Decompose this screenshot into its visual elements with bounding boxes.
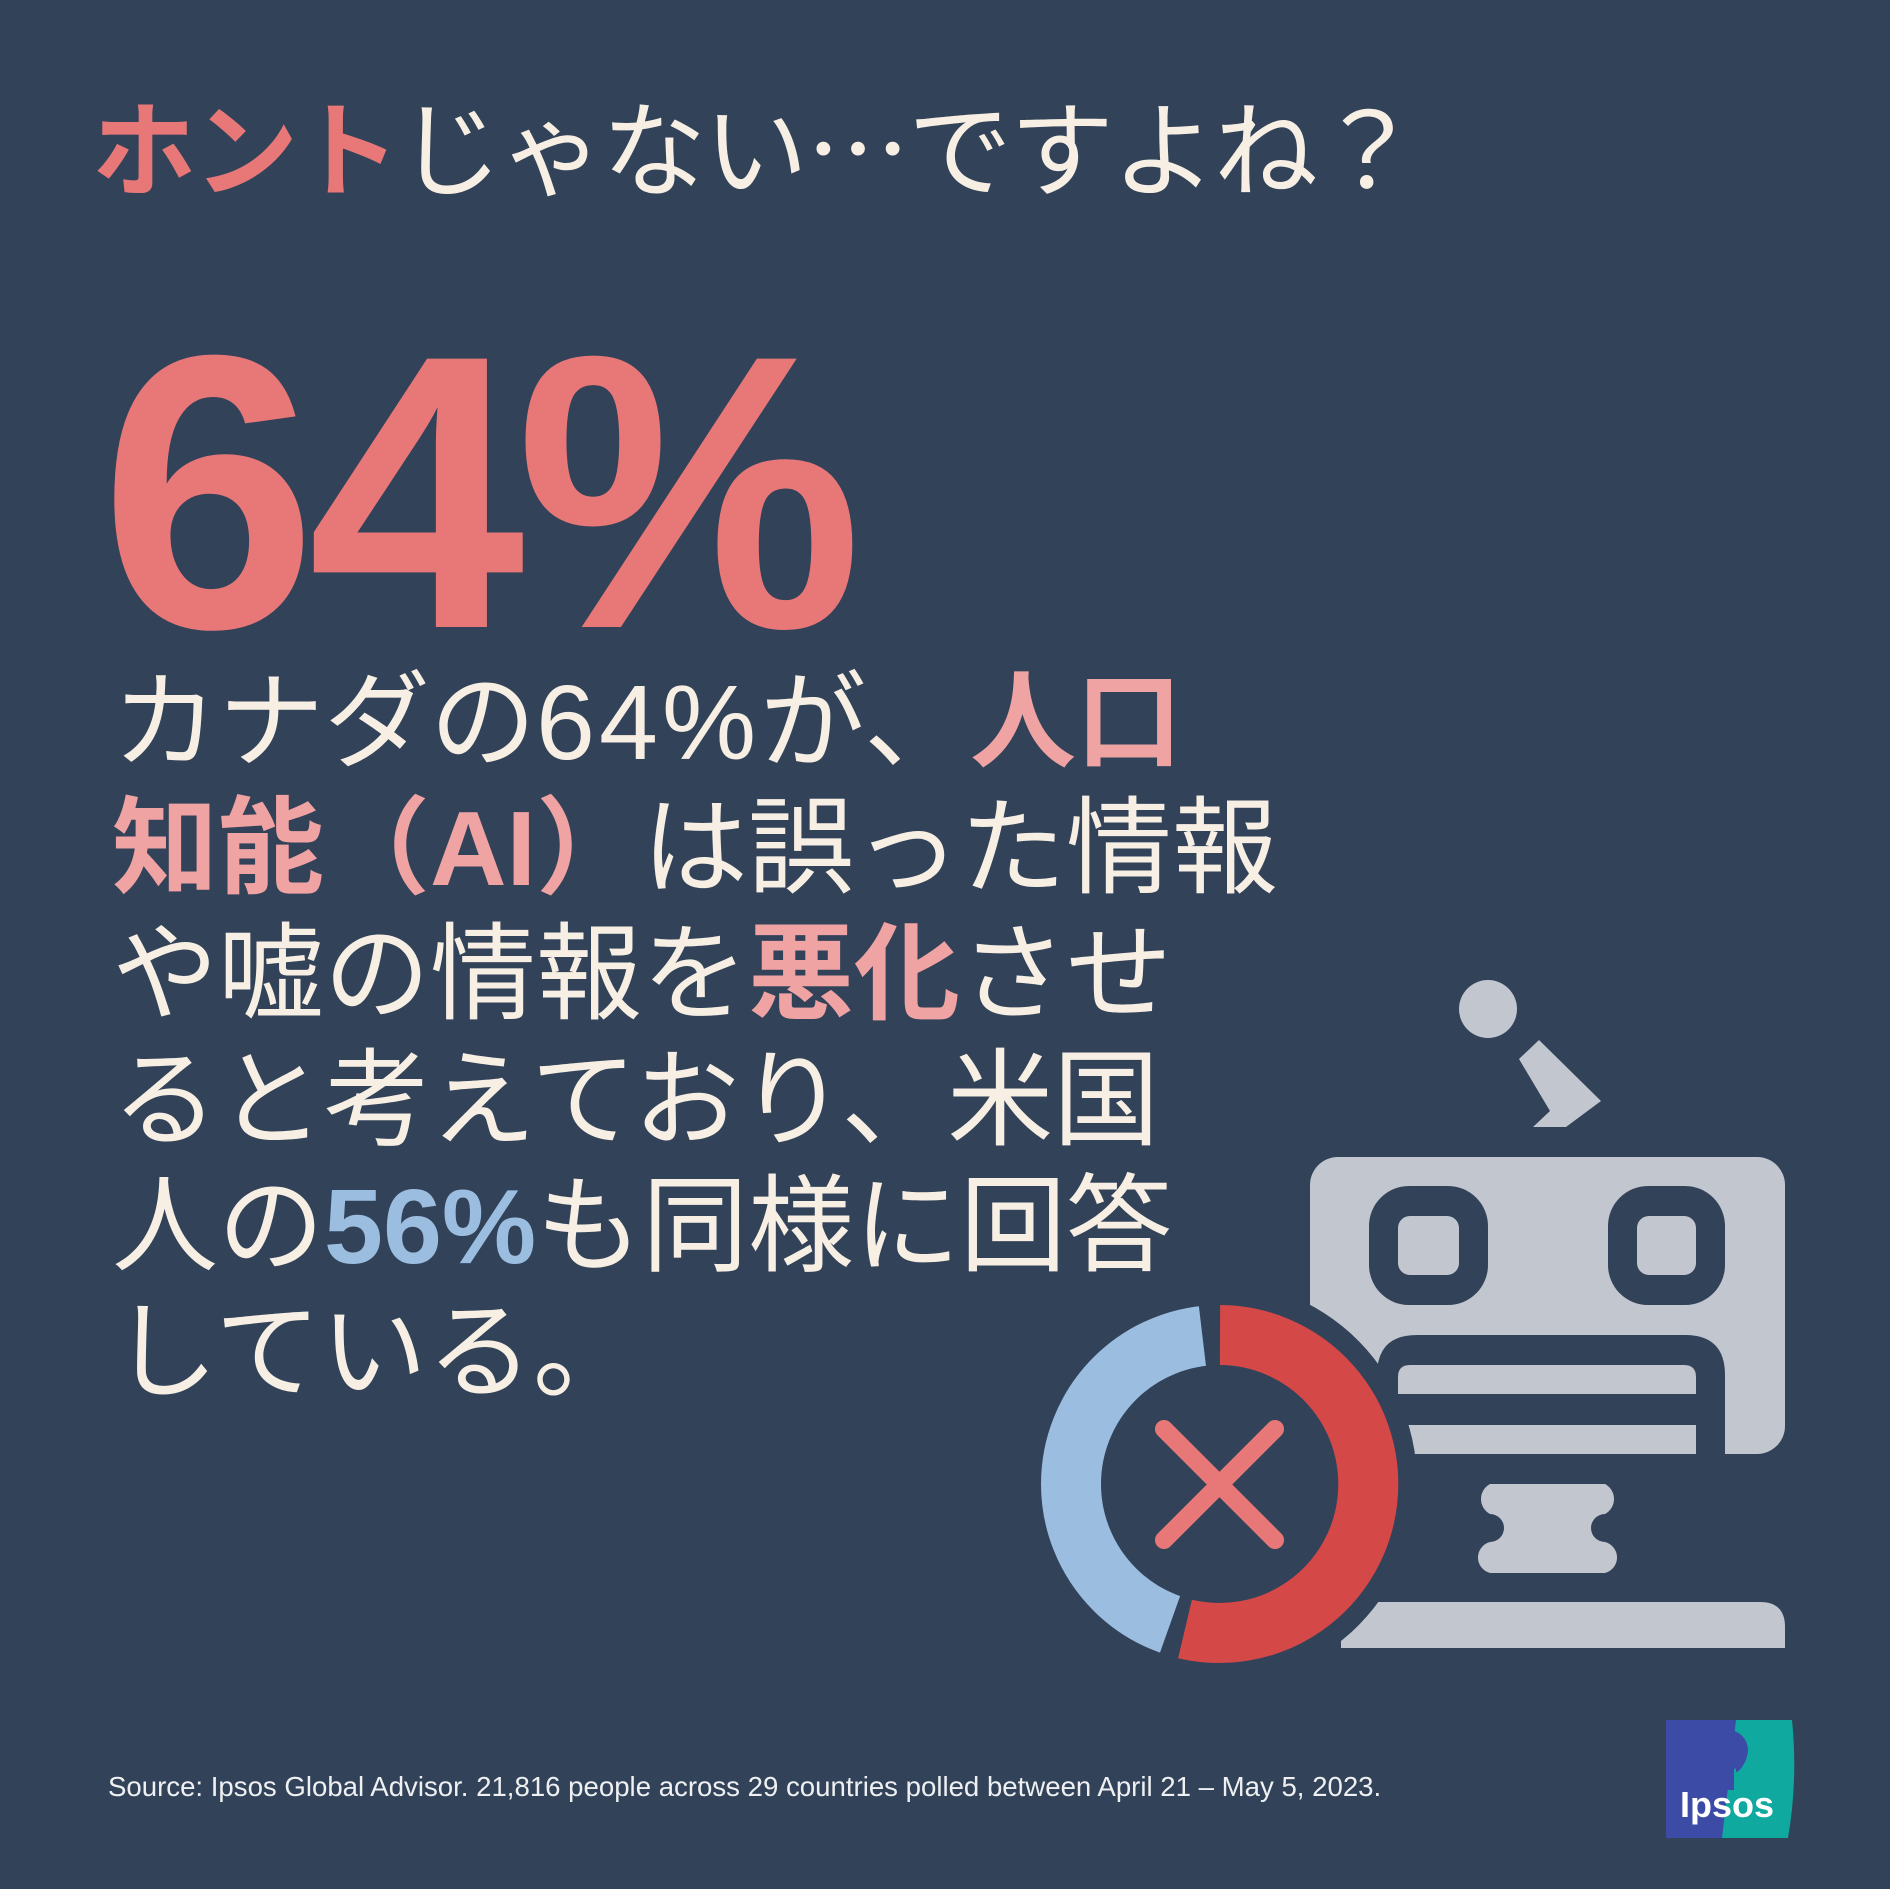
logo: Ipsos: Ipsos [1680,1784,1774,1825]
body text: ると考えており、米国 [112,1042,1159,1160]
title: ホントじゃない…ですよね？ [92,67,1418,218]
body text: カナダの64%が、人口 [112,664,1182,782]
body text: 人の56%も同様に回答 [112,1168,1172,1286]
logo: Ipsos [1666,1720,1794,1838]
donut chart with X [1071,1281,1417,1685]
robot [1310,980,1785,1648]
big number 64%: 64% [100,274,854,710]
body text: 知能（AI）は誤った情報 [112,790,1278,908]
source text: Source: Ipsos Global Advisor. 21,816 people across 29 countries polled between April 21 – May 5, 2023. [108,1771,1381,1802]
body text: している。 [112,1294,639,1412]
body text: や嘘の情報を悪化させ [112,916,1172,1034]
body text [112,664,1278,1412]
